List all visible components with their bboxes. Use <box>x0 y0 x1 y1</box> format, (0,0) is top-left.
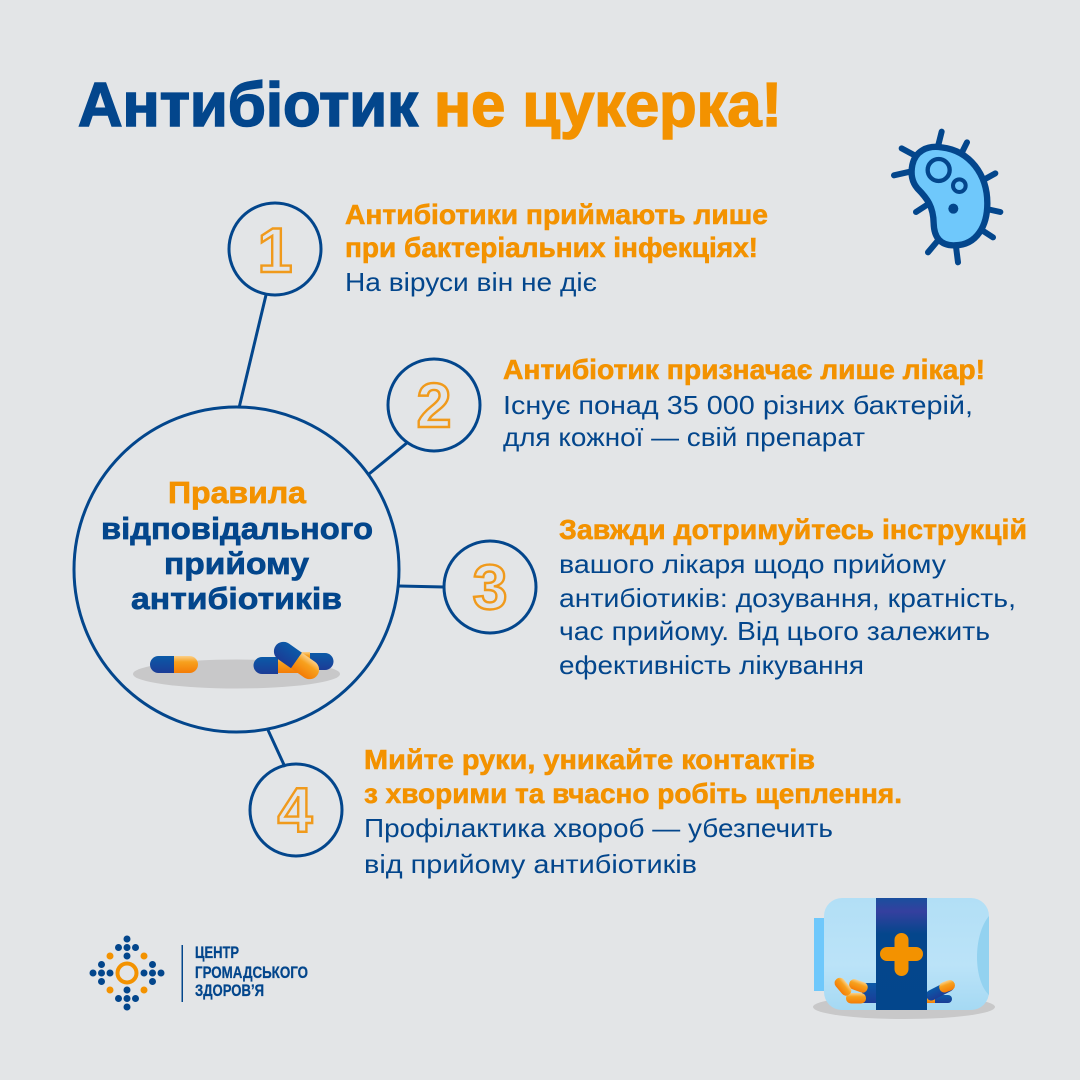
rule 3 text: час прийому. Від цього залежить <box>559 616 990 646</box>
rule 4 text: Профілактика хвороб — убезпечить <box>364 813 833 843</box>
rule 3 text: вашого лікаря щодо прийому <box>559 549 946 579</box>
rule 4 text <box>364 744 902 879</box>
logo mark <box>90 936 164 1010</box>
rule 1 text <box>345 199 768 297</box>
title <box>78 71 782 140</box>
central heading: Правила <box>168 475 307 510</box>
logo text: ГРОМАДСЬКОГО <box>195 963 308 982</box>
central heading <box>101 475 373 616</box>
central heading: відповідального <box>101 511 373 546</box>
rule 3 text: антибіотиків: дозування, кратність, <box>559 583 1016 613</box>
rule 4 text: від прийому антибіотиків <box>364 849 697 879</box>
rule 3 text: Завжди дотримуйтесь інструкцій <box>559 514 1027 545</box>
capsules on shadow <box>133 638 340 688</box>
rule 3 number: 3 <box>472 553 508 623</box>
central heading: антибіотиків <box>131 581 342 616</box>
logo text: ЦЕНТР <box>195 943 239 962</box>
logo text <box>182 943 308 1002</box>
rule 2 text: Антибіотик призначає лише лікар! <box>503 354 985 385</box>
rule 3 text <box>559 514 1027 680</box>
rule 4 text: Мийте руки, уникайте контактів <box>364 744 815 775</box>
rule 4 text: з хворими та вчасно робіть щеплення. <box>364 778 902 809</box>
rule 1 text: при бактеріальних інфекціях! <box>345 232 758 263</box>
panel: central circle <box>74 407 399 732</box>
rule 1 text: На віруси він не діє <box>345 267 597 297</box>
rule 4 number: 4 <box>277 776 313 846</box>
icon: bacterium <box>894 132 1000 262</box>
rule 2 text: для кожної — свій препарат <box>503 422 865 452</box>
rule 1 number: 1 <box>257 216 293 286</box>
logo text: ЗДОРОВ’Я <box>195 981 264 1000</box>
title: Антибіотик <box>78 71 419 140</box>
rule 2 number <box>388 359 480 451</box>
central heading: прийому <box>164 546 310 581</box>
rule 3 text: ефективність лікування <box>559 650 864 680</box>
rule 1 text: Антибіотики приймають лише <box>345 199 768 230</box>
connector lines <box>239 295 444 767</box>
rule 2 text: Існує понад 35 000 різних бактерій, <box>503 390 973 420</box>
icon: pill bottle <box>813 898 995 1019</box>
rule 3 number <box>444 541 536 633</box>
rule 4 number <box>250 764 342 856</box>
rule 2 number: 2 <box>416 371 452 441</box>
rule 2 text <box>503 354 985 452</box>
title: не цукерка! <box>434 71 782 140</box>
rule 1 number <box>229 203 321 295</box>
